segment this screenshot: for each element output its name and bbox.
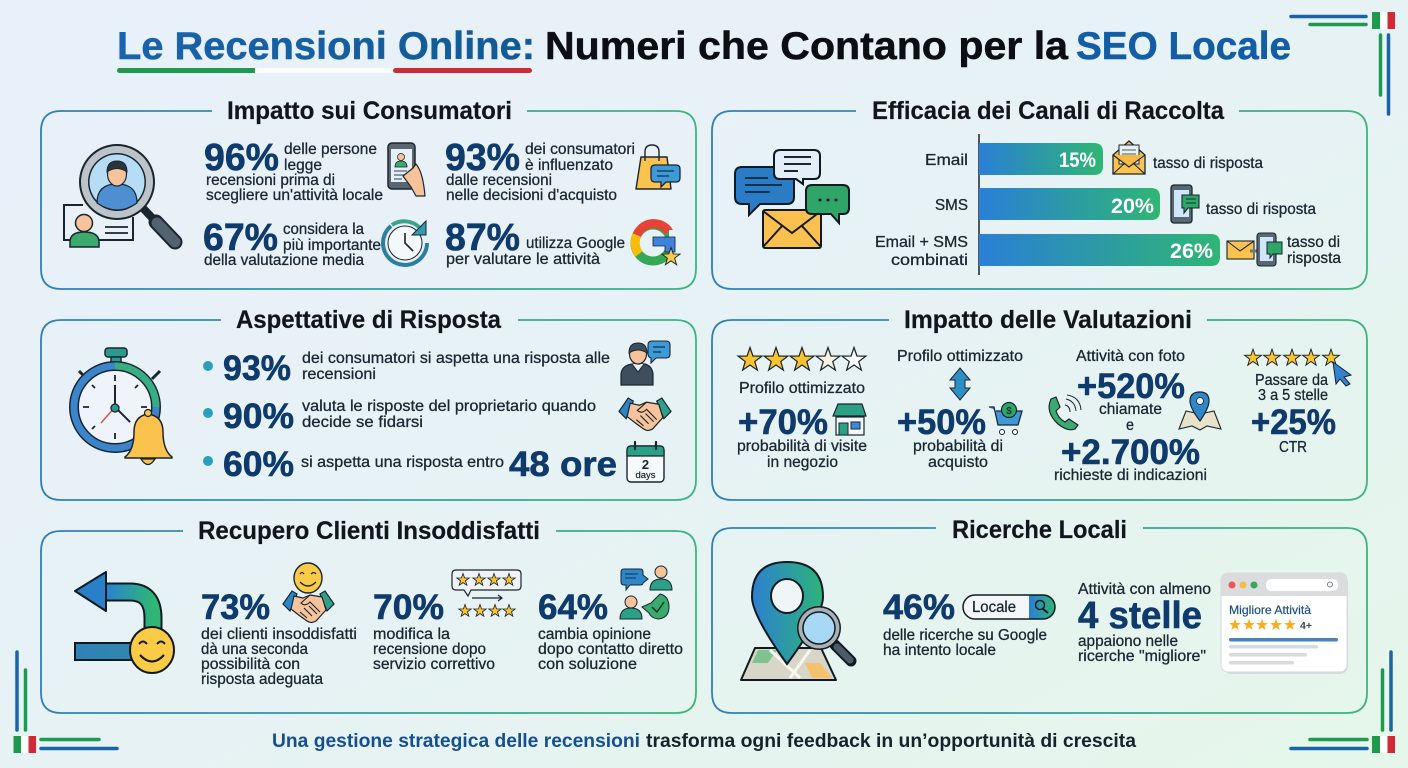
corner decoration: bottom right — [1291, 652, 1395, 753]
stat: 73%: 73% — [201, 588, 270, 627]
bar: Email 15%: 15% — [1059, 149, 1096, 172]
stat: 73%: risposta adeguata — [201, 671, 323, 688]
stat: 96%: scegliere un'attività locale — [206, 187, 383, 204]
stat: 60%: 60% — [223, 445, 294, 484]
icon: phone call — [1049, 395, 1081, 430]
stat: 64%: dopo contatto diretto — [538, 641, 683, 658]
heading: Aspettative di Risposta — [236, 306, 502, 334]
stat: 90%: 90% — [223, 397, 294, 436]
stat: 46%: 46% — [883, 588, 955, 627]
label: Email + SMS combinati: Email + SMS — [875, 234, 968, 251]
stat: 93% — [203, 349, 610, 388]
column: da 3 a 5 stelle: 3 a 5 stelle — [1258, 387, 1328, 404]
stat: 70%: servizio correttivo — [373, 656, 495, 673]
icon: map pin — [1179, 392, 1221, 430]
label: tasso di risposta: risposta — [1287, 250, 1341, 267]
stat: 70%: modifica la — [373, 626, 450, 643]
stat: 46%: delle ricerche su Google — [883, 627, 1047, 644]
stat: 93% — [445, 137, 635, 204]
footer takeaway: Una gestione strategica delle recensioni — [272, 731, 640, 752]
icon: up and down arrow — [950, 368, 970, 400]
stat: 93%: è influenzato — [525, 157, 613, 174]
icon: magnifier on person — [64, 144, 175, 247]
label: Email: Email — [925, 152, 968, 169]
stat: 73%: dà una seconda — [201, 641, 308, 658]
label: tasso di risposta: tasso di risposta — [1153, 155, 1263, 172]
icon: three and a half stars — [738, 348, 866, 370]
icon: open envelope — [1113, 141, 1145, 174]
icon: map pin with magnifier — [741, 562, 851, 680]
stat: 70% — [373, 588, 495, 673]
stat: 93%: 93% — [445, 137, 520, 179]
label: Email + SMS combinati — [875, 234, 968, 269]
icon: calendar 2 days — [627, 442, 664, 482]
label: Email + SMS combinati: combinati — [891, 252, 968, 269]
column: profilo ottimizzato visite: Profilo ottimizzato — [739, 380, 865, 397]
browser mockup card: Migliore Attività — [1229, 603, 1311, 617]
column: profilo ottimizzato visite: in negozio — [767, 454, 838, 471]
column: profilo ottimizzato visite: +70% — [738, 403, 828, 442]
column: attività con foto: Attività con foto — [1076, 348, 1185, 365]
stat: 96% — [204, 137, 383, 204]
bar: SMS 20% — [979, 188, 1160, 220]
stat: 93%: dei consumatori — [525, 141, 635, 158]
stat: 90% — [203, 397, 596, 436]
panel: Aspettative di Risposta — [41, 306, 696, 500]
icon: people, chat and check — [620, 566, 672, 619]
label: tasso di risposta: tasso di — [1287, 234, 1340, 251]
stat: 73% — [201, 588, 357, 688]
bar: SMS 20%: 20% — [1111, 195, 1154, 218]
heading: Impatto delle Valutazioni — [904, 306, 1192, 334]
icon: phone in hand — [388, 143, 425, 196]
browser mockup card — [1221, 573, 1348, 674]
icon: cursor — [1333, 362, 1351, 386]
panel: Impatto sui Consumatori — [41, 97, 696, 289]
stat: 96%: recensioni prima di — [206, 172, 335, 189]
column: profilo ottimizzato acquisto: Profilo ottimizzato — [897, 348, 1023, 365]
column: profilo ottimizzato visite: probabilità di visite — [737, 438, 867, 455]
column: attività con foto — [1049, 348, 1221, 484]
stat: 46%: ha intento locale — [883, 642, 996, 659]
stat: 60%: si aspetta una risposta entro — [301, 454, 504, 471]
label: SMS: SMS — [935, 197, 968, 214]
icon: shopping cart: $ — [1006, 406, 1012, 417]
stat: 87%: utilizza Google — [526, 235, 625, 252]
icon: search bar: Locale — [972, 599, 1016, 616]
title: Numeri che Contano per la — [545, 25, 1069, 68]
icon: search bar — [963, 595, 1055, 619]
stat: 93%: recensioni — [302, 366, 376, 383]
icon: calendar 2 days: days — [635, 470, 656, 481]
stat: 64%: cambia opinione — [538, 626, 651, 643]
stat: 67%: più importante — [283, 237, 381, 254]
stat: 64%: 64% — [538, 588, 608, 627]
column: attività con foto: +2.700% — [1061, 433, 1200, 472]
icon: store — [833, 404, 866, 435]
bar: Email 15% — [979, 143, 1103, 175]
stat: 4 stelle: appaiono nelle — [1078, 633, 1178, 650]
heading: Recupero Clienti Insoddisfatti — [198, 517, 540, 545]
column: attività con foto: chiamate — [1099, 401, 1162, 418]
stat: 93%: nelle decisioni d'acquisto — [446, 187, 617, 204]
stat: 90%: valuta le risposte del proprietario quando — [302, 398, 596, 415]
icon: five stars — [1245, 349, 1339, 365]
icon: shopping bag with chat — [636, 145, 680, 189]
column: profilo ottimizzato visite — [737, 348, 867, 471]
icon: owner with chat bubble — [621, 341, 670, 385]
stat: 67%: 67% — [203, 217, 278, 259]
stat: 87%: 87% — [445, 217, 520, 259]
icon: clock with refresh arrow — [383, 221, 427, 265]
stat: 67%: della valutazione media — [204, 252, 364, 269]
stat: 67%: considera la — [283, 221, 364, 238]
footer takeaway — [272, 731, 1136, 752]
stat: 87%: per valutare le attività — [446, 251, 600, 268]
column: profilo ottimizzato acquisto: +50% — [897, 403, 986, 442]
column: da 3 a 5 stelle: +25% — [1251, 403, 1336, 442]
icon: smiley and handshake — [283, 563, 334, 622]
stat: 90%: decide se fidarsi — [302, 414, 423, 431]
stat: 93%: 93% — [223, 349, 291, 388]
bar: Email + SMS 26%: 26% — [1170, 240, 1213, 263]
stat: 67% — [203, 217, 381, 269]
icon: envelope plus phone — [1227, 233, 1282, 266]
icon: calendar 2 days: 2 — [642, 457, 649, 472]
column: profilo ottimizzato acquisto: probabilità di — [913, 438, 1003, 455]
column: attività con foto: +520% — [1077, 367, 1185, 406]
icon: chat bubbles and envelope — [735, 150, 849, 248]
panel: Recupero Clienti Insoddisfatti — [41, 517, 696, 713]
column: attività con foto: richieste di indicazioni — [1054, 467, 1207, 484]
column: profilo ottimizzato acquisto — [897, 348, 1023, 471]
panel: Ricerche Locali — [712, 516, 1367, 713]
bar: Email + SMS 26% — [979, 234, 1220, 266]
title: Le Recensioni Online: — [117, 25, 535, 68]
icon: review stars improving — [452, 570, 521, 616]
panel: Efficacia dei Canali di Raccolta — [712, 97, 1367, 289]
browser mockup card: 4+ — [1300, 620, 1312, 632]
label: tasso di risposta: tasso di risposta — [1206, 201, 1316, 218]
column: da 3 a 5 stelle — [1245, 349, 1351, 456]
stat: 4 stelle — [1078, 581, 1211, 665]
title: SEO Locale — [1076, 25, 1291, 68]
corner decoration: top right — [1291, 12, 1395, 114]
column: profilo ottimizzato acquisto: acquisto — [928, 454, 988, 471]
column: da 3 a 5 stelle: CTR — [1279, 439, 1307, 456]
stat: 73%: dei clienti insoddisfatti — [201, 626, 357, 643]
stat: 4 stelle: 4 stelle — [1078, 595, 1202, 637]
stat: 64%: con soluzione — [538, 656, 637, 673]
stat: 60% — [203, 445, 617, 484]
stat: 93%: dei consumatori si aspetta una risposta alle — [302, 350, 610, 367]
stat: 96%: 96% — [204, 137, 279, 179]
stat: 46% — [883, 588, 1047, 659]
heading: Impatto sui Consumatori — [227, 97, 512, 125]
panel: Impatto delle Valutazioni — [712, 306, 1367, 500]
heading: Efficacia dei Canali di Raccolta — [872, 97, 1225, 125]
stat: 70%: recensione dopo — [373, 641, 486, 658]
footer takeaway: trasforma ogni feedback in un’opportunità di crescita — [646, 731, 1136, 752]
label: tasso di risposta — [1287, 234, 1341, 267]
column: da 3 a 5 stelle: Passare da — [1255, 372, 1328, 389]
icon: stopwatch with bell — [74, 348, 172, 464]
icon: return arrow with smiley — [75, 572, 174, 673]
corner decoration: bottom left — [14, 652, 117, 753]
stat: 4 stelle: ricerche "migliore" — [1078, 648, 1206, 665]
stat: 87% — [445, 217, 625, 268]
stat: 96%: delle persone — [284, 141, 377, 158]
stat: 60%: 48 ore — [509, 445, 617, 484]
stat: 64% — [538, 588, 683, 673]
stat: 73%: possibilità con — [201, 656, 300, 673]
icon: handshake — [619, 398, 671, 430]
icon: phone with message — [1171, 185, 1199, 223]
column: attività con foto: e — [1126, 417, 1134, 434]
stat: 70%: 70% — [373, 588, 444, 627]
stat: 96%: legge — [284, 157, 322, 174]
stat: 4 stelle: Attività con almeno — [1078, 581, 1211, 598]
title — [117, 25, 1291, 68]
stat: 93%: dalle recensioni — [446, 172, 552, 189]
icon: Google G with star — [635, 224, 681, 265]
heading: Ricerche Locali — [952, 516, 1127, 544]
title underline: Italian tricolour — [117, 68, 532, 73]
chart axis — [978, 134, 980, 275]
